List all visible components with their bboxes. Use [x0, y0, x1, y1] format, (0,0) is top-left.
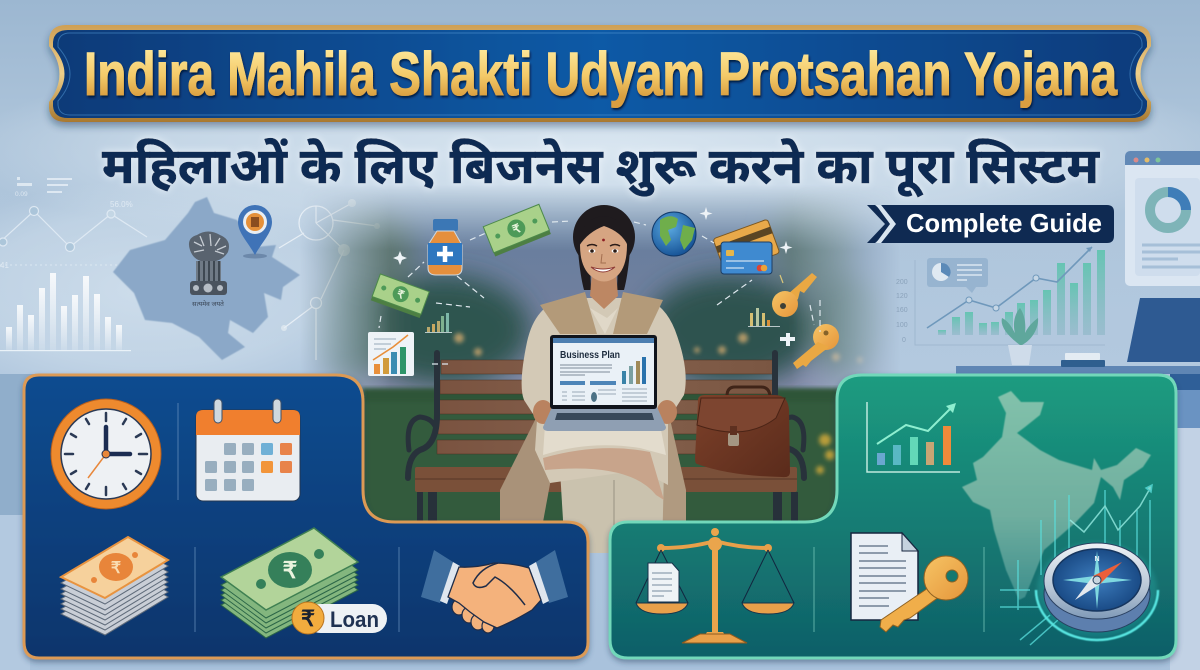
map of Rajasthan: [113, 197, 300, 360]
desk with plant, books and monitor: [956, 298, 1200, 374]
hands: [533, 400, 677, 424]
floating icon: key upper: [772, 273, 817, 317]
badge: Complete Guide: Complete Guide: [906, 208, 1102, 238]
laptop text: Business Plan: Business Plan: [560, 350, 620, 361]
icon: stack of orange notes: [61, 537, 168, 635]
icon: national emblem: [189, 232, 229, 308]
trousers: [560, 470, 664, 553]
floating icon: cash left: [371, 274, 429, 318]
panel: green growth and legal: [610, 375, 1176, 658]
loan tag: Loan: [330, 607, 379, 632]
floating icon: cash left: ₹: [395, 288, 406, 302]
floating icon: cash top: [483, 204, 551, 256]
icon: compass with data glow: N: [1094, 556, 1100, 563]
title banner: [49, 25, 1151, 122]
floating icon: globe: [652, 212, 696, 256]
icon: clock: [51, 399, 161, 509]
icon: stack of orange notes: ₹: [111, 560, 121, 577]
floating icon: cash top: ₹: [510, 221, 523, 237]
floating icon: medicine bottle: [428, 219, 462, 275]
right background: growth chart: 160: [896, 307, 908, 314]
loan tag: ₹: [301, 606, 315, 631]
park bench: [408, 353, 804, 524]
icon: location pin: [238, 205, 272, 258]
badge: Complete Guide: [867, 205, 1114, 243]
dashed connectors and sparkles: [379, 207, 820, 364]
left background: analytics line chart: [0, 177, 150, 270]
scene: dusk park backdrop: [306, 190, 891, 520]
right background: growth chart: 200: [896, 279, 908, 286]
grass: [362, 397, 840, 553]
floating icon: report card: [368, 332, 414, 376]
icon: calendar: [196, 399, 300, 501]
floating icon: key lower: [793, 324, 839, 369]
icon: stack of green notes with loan tag: [221, 528, 387, 638]
woman with laptop: [500, 205, 686, 553]
face and neck: [579, 216, 628, 309]
left background: analytics line chart: 56.0%: [110, 200, 133, 209]
floating icon: small bars: [425, 313, 452, 333]
hair: [573, 205, 635, 290]
right background: dashboard window: [1125, 151, 1200, 286]
icon: stack of green notes with loan tag: ₹: [283, 557, 298, 583]
map of India: [962, 391, 1151, 600]
icon: speech card: [927, 258, 988, 293]
loan tag: [292, 602, 387, 634]
network lines with pie chart: [279, 199, 380, 360]
right background: growth chart: 0: [902, 337, 906, 344]
flowers: [816, 434, 835, 474]
kurta: [522, 298, 686, 500]
laptop: [543, 335, 666, 431]
right background: growth chart: [896, 247, 1105, 345]
left background: analytics line chart: 0.09: [15, 191, 28, 198]
floating icon: small bars right: [748, 308, 780, 327]
shawl falling sides: [500, 410, 686, 522]
subtitle: महिलाओं के लिए बिजनेस शुरू करने का पूरा सिस्टम: [102, 138, 1100, 204]
right background: growth chart: 120: [896, 293, 908, 300]
floating icon: credit cards: [713, 219, 780, 274]
briefcase: [695, 387, 790, 477]
icon: compass with data glow: [1000, 485, 1158, 645]
icon: handshake: [421, 550, 568, 633]
divider lines: [178, 403, 399, 632]
panel: blue time and finance: [24, 375, 588, 658]
dupatta: [540, 292, 663, 334]
chart with rising arrow: [867, 402, 960, 472]
divider lines: [814, 547, 984, 632]
left background: bar chart: [0, 273, 131, 351]
icon: document with key: [851, 533, 968, 632]
icon: national emblem: सत्यमेव जयते: [192, 300, 224, 308]
icon: scales with document: [636, 528, 794, 643]
left background: analytics line chart: 41: [0, 261, 9, 270]
right background: growth chart: 100: [896, 322, 908, 329]
